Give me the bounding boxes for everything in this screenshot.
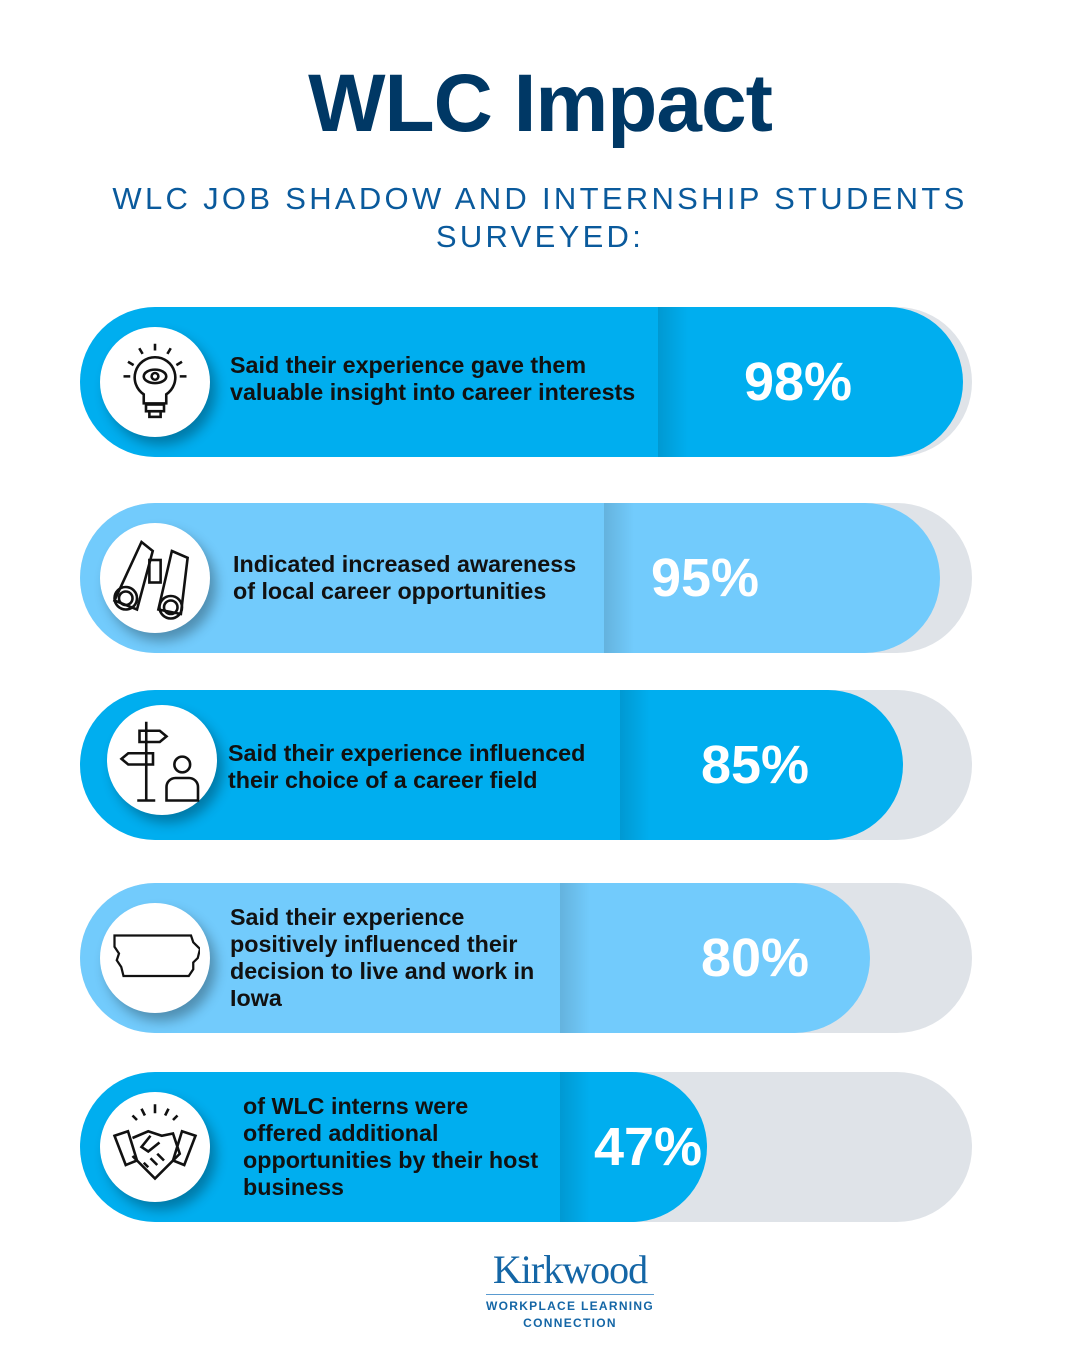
text: Iowa [230, 985, 282, 1011]
percent: 98% [744, 352, 852, 412]
text: their choice of a career field [228, 767, 537, 793]
subtitle: SURVEYED: [436, 219, 644, 254]
icon: binoculars [100, 523, 210, 633]
text: Said their experience gave them [230, 352, 586, 378]
text: Indicated increased awareness [233, 551, 576, 577]
text [230, 904, 534, 1011]
text [243, 1093, 538, 1200]
text: business [243, 1174, 344, 1200]
text: Said their experience influenced [228, 740, 585, 766]
text: offered additional [243, 1120, 438, 1146]
percent: 85% [701, 735, 809, 795]
subtitle: WLC JOB SHADOW AND INTERNSHIP STUDENTS [112, 181, 968, 216]
row 1: 98% [80, 307, 972, 457]
percent: 80% [701, 928, 809, 988]
text: opportunities by their host [243, 1147, 538, 1173]
row 4: 80% [80, 883, 972, 1033]
text [233, 551, 576, 604]
text [230, 352, 635, 405]
text: positively influenced their [230, 931, 517, 957]
row 3: 85% [80, 690, 972, 840]
percent: 95% [651, 548, 759, 608]
row 2: 95% [80, 503, 972, 653]
text: decision to live and work in [230, 958, 534, 984]
title: WLC Impact [308, 58, 772, 149]
icon: Iowa map [100, 903, 210, 1013]
text: Said their experience [230, 904, 464, 930]
text: valuable insight into career interests [230, 379, 635, 405]
logo: Kirkwood: WORKPLACE LEARNING [486, 1299, 654, 1313]
percent: 47% [594, 1117, 702, 1177]
icon: handshake [100, 1092, 210, 1202]
logo: Kirkwood: CONNECTION [523, 1316, 617, 1330]
logo: Kirkwood: Kirkwood [493, 1247, 647, 1292]
icon: lightbulb eye [100, 327, 210, 437]
text: of local career opportunities [233, 578, 546, 604]
text: of WLC interns were [243, 1093, 468, 1119]
text [228, 740, 585, 793]
subtitle [112, 181, 968, 254]
icon: signpost person [107, 705, 217, 815]
logo: Kirkwood [486, 1247, 654, 1330]
row 5: 47% [80, 1072, 972, 1222]
